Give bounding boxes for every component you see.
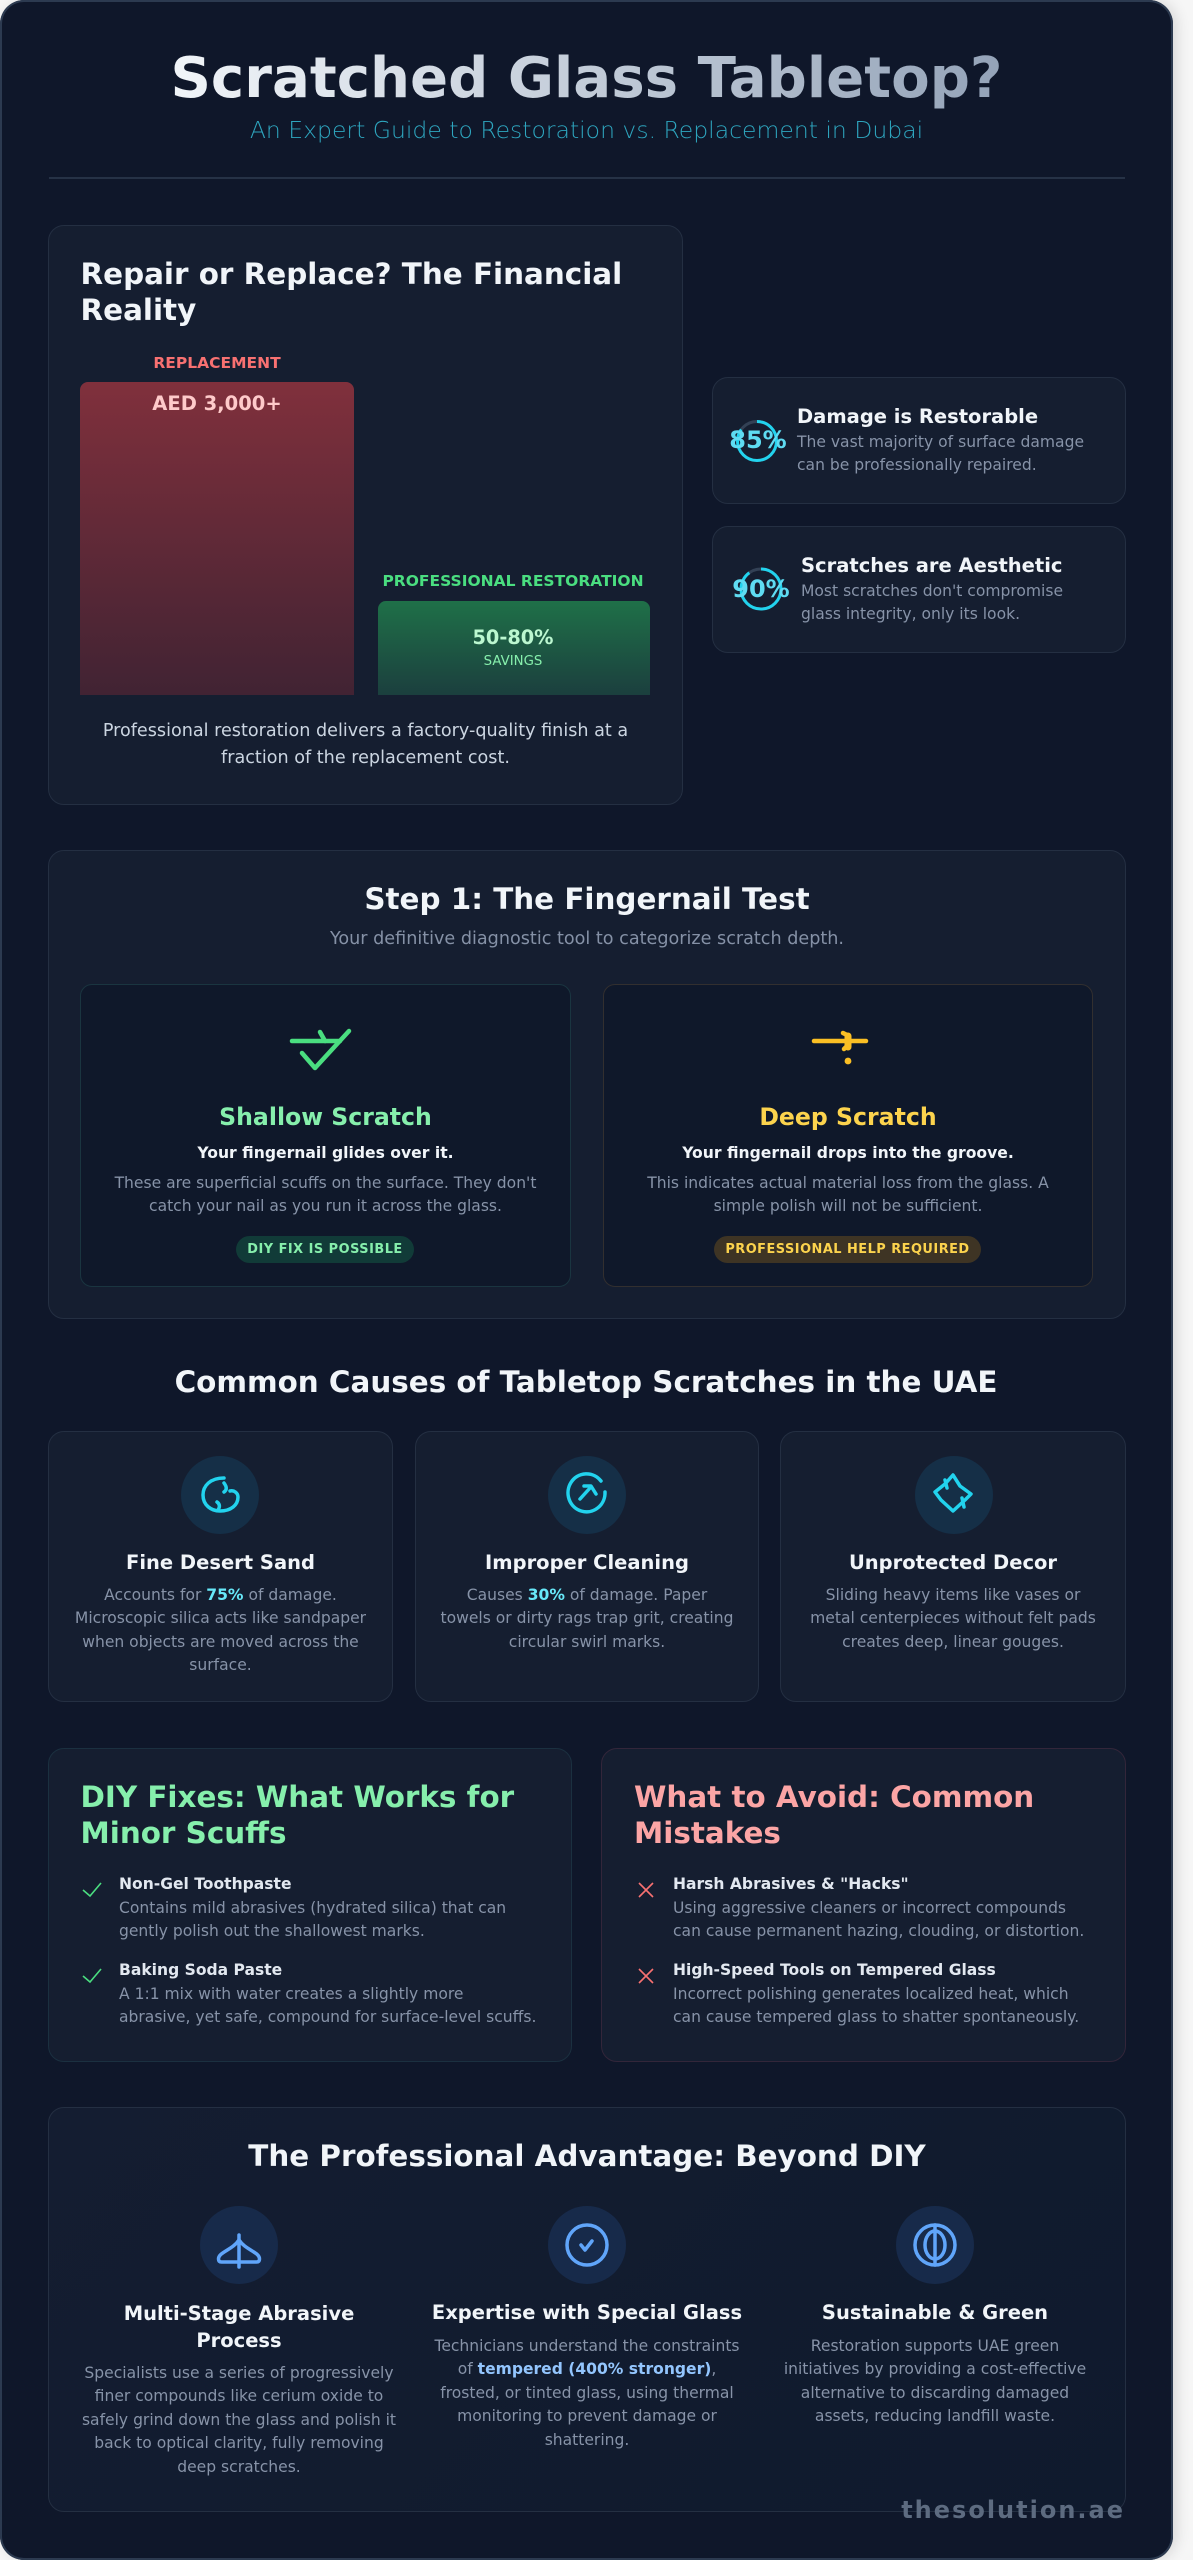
text: sustainable: Restoration supports UAE green bbox=[811, 2337, 1059, 2355]
item: high-speed tools: Incorrect polishing generates localized heat, which bbox=[673, 1985, 1069, 2003]
caption: financial summary: fraction of the replacement cost. bbox=[221, 748, 510, 768]
icon: cross 2 bbox=[638, 1968, 654, 1984]
heading: financial: Repair or Replace? The Financial bbox=[80, 256, 622, 290]
value: AED: AED 3,000+ bbox=[152, 392, 282, 415]
card: deep scratch bbox=[603, 984, 1093, 1287]
bar: restoration cost bbox=[378, 601, 650, 695]
text: special glass: frosted, or tinted glass, using thermal bbox=[440, 2384, 734, 2402]
text: cleaning bbox=[440, 1586, 733, 1651]
item: toothpaste: Non-Gel Toothpaste bbox=[119, 1875, 292, 1893]
title: Scratched Glass Tabletop? bbox=[170, 46, 1003, 111]
text: decor: Sliding heavy items like vases or bbox=[826, 1586, 1080, 1604]
value: savings: 50-80% bbox=[472, 626, 554, 649]
heading: DIY bbox=[80, 1780, 514, 1850]
title: decor: Unprotected Decor bbox=[849, 1551, 1057, 1574]
panel: financial reality bbox=[48, 225, 683, 805]
label: replacement: REPLACEMENT bbox=[153, 354, 281, 372]
text: sand: Microscopic silica acts like sandpaper bbox=[75, 1609, 366, 1627]
stat text: restorable: Damage is Restorable bbox=[797, 405, 1038, 428]
title: sustainable: Sustainable & Green bbox=[822, 2301, 1048, 2324]
title: special glass: Expertise with Special Glass bbox=[432, 2301, 742, 2324]
badge: professional bbox=[714, 1236, 981, 1263]
icon: ring 90% bbox=[740, 568, 782, 610]
icon: decor bbox=[915, 1456, 993, 1534]
heading: fingernail test: Step 1: The Fingernail Test bbox=[364, 882, 810, 916]
badge: DIY bbox=[236, 1236, 414, 1263]
text: cleaning: circular swirl marks. bbox=[509, 1633, 665, 1651]
panel: DIY fixes bbox=[48, 1748, 572, 2062]
panel: fingernail test bbox=[48, 850, 1126, 1319]
text: abrasive: deep scratches. bbox=[177, 2458, 301, 2476]
icon: shallow check bbox=[290, 1028, 352, 1070]
subheading: fingernail test: Your definitive diagnostic tool to categorize scratch depth. bbox=[330, 929, 844, 949]
heading: common causes: Common Causes of Tabletop Scratches in the UAE bbox=[175, 1365, 997, 1399]
panel: improper cleaning bbox=[415, 1431, 759, 1702]
text: special glass bbox=[434, 2337, 740, 2449]
caption: financial summary bbox=[103, 721, 628, 768]
title: abrasive: Process bbox=[196, 2329, 282, 2352]
title: deep scratch: Deep Scratch bbox=[759, 1103, 937, 1131]
icon: deep warning bbox=[812, 1030, 868, 1064]
stat description: restorable bbox=[796, 433, 1084, 474]
bar: replacement cost bbox=[80, 382, 354, 695]
text: sand: Accounts for 75% of damage. bbox=[104, 1586, 337, 1604]
text: special glass: Technicians understand the constraints bbox=[434, 2337, 740, 2355]
heading: financial bbox=[80, 256, 622, 326]
text: sustainable: alternative to discarding damaged bbox=[801, 2384, 1069, 2402]
item: high-speed tools: High-Speed Tools on Tempered Glass bbox=[673, 1961, 996, 1979]
icon: special glass bbox=[548, 2206, 626, 2284]
stat description: restorable: can be professionally repaired. bbox=[797, 456, 1037, 474]
text: shallow description: These are superficial scuffs on the surface. They don't bbox=[115, 1174, 536, 1192]
watermark: thesolution.ae bbox=[901, 2496, 1125, 2524]
item: toothpaste: gently polish out the shallowest marks. bbox=[119, 1922, 425, 1940]
panel: desert sand bbox=[48, 1431, 393, 1702]
item: baking soda: Baking Soda Paste bbox=[119, 1961, 282, 1979]
panel: stat 90% bbox=[712, 526, 1126, 653]
card: shallow scratch bbox=[80, 984, 571, 1287]
title: abrasive bbox=[124, 2302, 354, 2352]
item: abrasives bbox=[673, 1875, 1084, 1940]
text: sand: when objects are moved across the bbox=[82, 1633, 359, 1651]
text: shallow description bbox=[114, 1174, 536, 1215]
title: abrasive: Multi-Stage Abrasive bbox=[124, 2302, 354, 2324]
panel: stat 85% bbox=[712, 377, 1126, 504]
label: professional restoration: PROFESSIONAL RESTORATION bbox=[382, 572, 644, 590]
icon: abrasive bbox=[200, 2206, 278, 2284]
stat text: aesthetic: Scratches are Aesthetic bbox=[801, 554, 1062, 577]
text: deep lead: Your fingernail drops into the groove. bbox=[682, 1144, 1014, 1162]
value: 85%: 85% bbox=[729, 426, 787, 454]
icon: sustainable bbox=[896, 2206, 974, 2284]
item: high-speed tools: can cause tempered glass to shatter spontaneously. bbox=[673, 2008, 1079, 2026]
stat description: aesthetic bbox=[801, 582, 1063, 623]
text: cleaning: Causes 30% of damage. Paper bbox=[467, 1586, 707, 1604]
panel: what to avoid bbox=[601, 1748, 1126, 2062]
item: toothpaste bbox=[119, 1875, 506, 1940]
text: shallow description: catch your nail as you run it across the glass. bbox=[149, 1197, 502, 1215]
heading: DIY: DIY Fixes: What Works for bbox=[80, 1780, 514, 1814]
panel: professional advantage bbox=[48, 2107, 1126, 2512]
heading: professional: The Professional Advantage: Beyond DIY bbox=[248, 2139, 926, 2173]
text: abrasive: safely grind down the glass and polish it bbox=[82, 2411, 396, 2429]
stat description: aesthetic: glass integrity, only its look. bbox=[801, 605, 1020, 623]
text: abrasive: Specialists use a series of progressively bbox=[84, 2364, 394, 2382]
icon: sand bbox=[181, 1456, 259, 1534]
text: decor bbox=[810, 1586, 1096, 1651]
text: deep description: This indicates actual material loss from the glass. A bbox=[647, 1174, 1049, 1192]
text: cleaning: towels or dirty rags trap grit, creating bbox=[441, 1609, 733, 1627]
text: shallow lead: Your fingernail glides over it. bbox=[197, 1144, 454, 1162]
item: abrasives: can cause permanent hazing, clouding, or distortion. bbox=[673, 1922, 1084, 1940]
subtitle: An Expert Guide to Restoration vs. Replacement in Dubai bbox=[250, 116, 923, 144]
icon: check 2 bbox=[82, 1968, 102, 1984]
stat description: aesthetic: Most scratches don't compromise bbox=[801, 582, 1063, 600]
icon: ring 85% bbox=[736, 420, 778, 462]
text: deep description bbox=[647, 1174, 1049, 1215]
item: abrasives: Harsh Abrasives & "Hacks" bbox=[673, 1875, 909, 1893]
text: abrasive bbox=[82, 2364, 396, 2476]
heading: avoid: What to Avoid: Common bbox=[634, 1780, 1034, 1814]
item: abrasives: Using aggressive cleaners or incorrect compounds bbox=[673, 1899, 1066, 1917]
text: sand: surface. bbox=[189, 1656, 252, 1674]
text: special glass: monitoring to prevent damage or bbox=[457, 2407, 717, 2425]
item: high-speed tools bbox=[673, 1961, 1079, 2026]
icon: cross 1 bbox=[638, 1882, 654, 1898]
heading: avoid bbox=[634, 1780, 1034, 1850]
text: decor: metal centerpieces without felt pads bbox=[810, 1609, 1096, 1627]
text: special glass: of tempered (400% stronger), bbox=[458, 2360, 716, 2378]
item: baking soda bbox=[119, 1961, 536, 2026]
stat description: restorable: The vast majority of surface damage bbox=[797, 433, 1084, 451]
text: special glass: shattering. bbox=[545, 2431, 629, 2449]
title: shallow scratch: Shallow Scratch bbox=[219, 1103, 432, 1131]
item: toothpaste: Contains mild abrasives (hydrated silica) that can bbox=[119, 1899, 506, 1917]
heading: avoid: Mistakes bbox=[634, 1816, 781, 1850]
text: abrasive: back to optical clarity, fully removing bbox=[94, 2434, 384, 2452]
text: abrasive: finer compounds like cerium oxide to bbox=[95, 2387, 383, 2405]
badge: DIY: DIY FIX IS POSSIBLE bbox=[247, 1242, 403, 1257]
icon: cleaning bbox=[548, 1456, 626, 1534]
item: baking soda: abrasive, yet safe, compound for surface-level scuffs. bbox=[119, 2008, 536, 2026]
heading: DIY: Minor Scuffs bbox=[80, 1816, 286, 1850]
text: sustainable: initiatives by providing a cost-effective bbox=[784, 2360, 1086, 2378]
icon: check 1 bbox=[82, 1882, 102, 1898]
value: 90%: 90% bbox=[732, 575, 790, 603]
title: cleaning: Improper Cleaning bbox=[485, 1551, 689, 1574]
title: sand: Fine Desert Sand bbox=[126, 1551, 315, 1574]
item: baking soda: A 1:1 mix with water creates a slightly more bbox=[119, 1985, 463, 2003]
text: sustainable bbox=[784, 2337, 1086, 2425]
panel: unprotected decor bbox=[780, 1431, 1126, 1702]
text: sustainable: assets, reducing landfill waste. bbox=[815, 2407, 1055, 2425]
caption: savings: SAVINGS bbox=[484, 654, 542, 669]
text: sand bbox=[75, 1586, 366, 1674]
caption: financial summary: Professional restoration delivers a factory-quality finish at a bbox=[103, 721, 628, 741]
text: deep description: simple polish will not be sufficient. bbox=[714, 1197, 982, 1215]
heading: financial: Reality bbox=[80, 292, 196, 326]
text: decor: creates deep, linear gouges. bbox=[842, 1633, 1064, 1651]
badge: professional: PROFESSIONAL HELP REQUIRED bbox=[725, 1242, 970, 1257]
